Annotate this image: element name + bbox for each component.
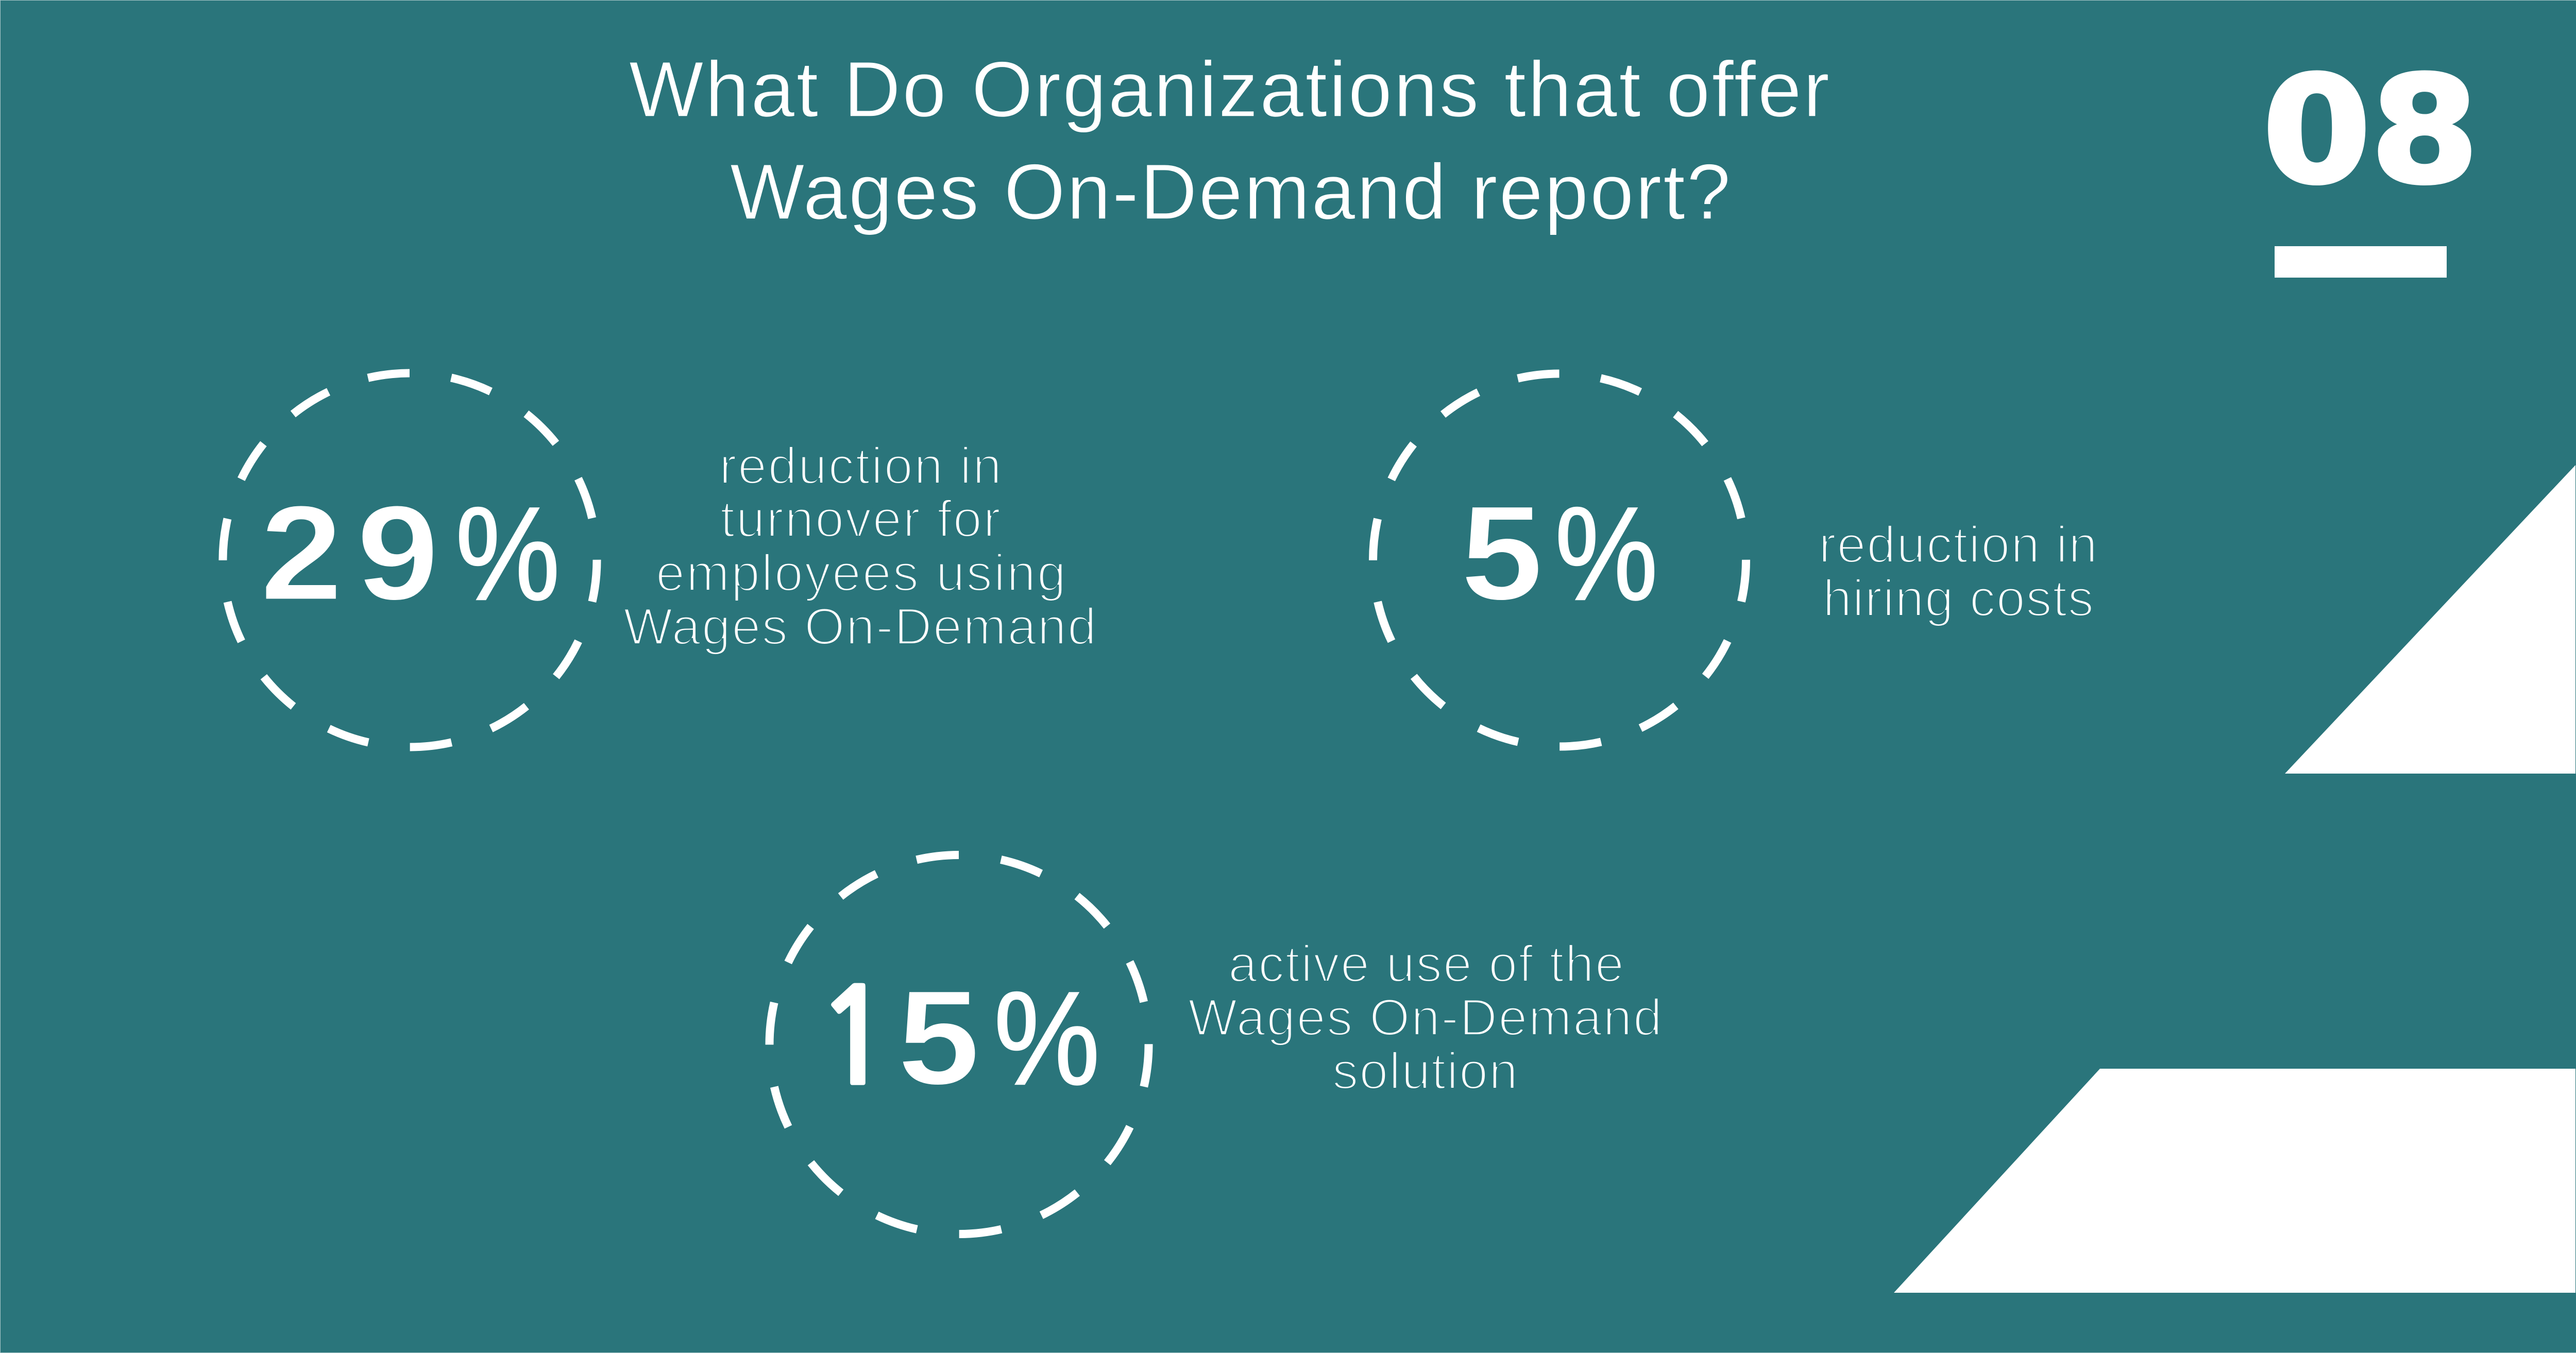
description 5%: hiring costs [1823,570,2094,627]
decorative white parallelogram [1894,1069,2575,1293]
description 29%: reduction in [719,437,1002,495]
value 5% [1461,477,1658,628]
value 29%: 2 [260,477,343,628]
description 29%: turnover for [720,490,1001,548]
description 5% [1819,516,2097,627]
dashed ring 15% [770,855,1149,1234]
value 29%: % [455,479,560,628]
stat: 5% hiring cost reduction [1373,374,2097,747]
value 5%: 5 [1461,477,1543,628]
dashed ring 29% [223,373,597,747]
description 15%: Wages On-Demand [1188,989,1662,1047]
title: Wages On-Demand report? [730,148,1731,236]
value 29%: 9 [357,477,439,628]
value 5%: % [1555,479,1658,628]
value 15%: % [994,964,1100,1112]
value 15%: 1 [815,973,895,1104]
stat: 29% turnover reduction [223,373,1096,747]
title [629,45,1829,236]
description 15%: active use of the [1228,935,1624,993]
dashed ring 5% [1373,374,1746,747]
description 5%: reduction in [1819,516,2097,574]
description 29%: employees using [656,544,1066,602]
decorative white triangle [2285,465,2575,774]
title: What Do Organizations that offer [629,45,1829,133]
section number badge [2263,45,2479,278]
description 15%: solution [1332,1042,1518,1100]
stat: 15% active use [770,855,1662,1234]
number 08: 08 [2263,45,2479,216]
value 15%: 5 [897,962,980,1113]
value 15% [815,962,1100,1113]
badge underline bar [2275,246,2447,278]
description 29% [623,437,1096,656]
value 29% [260,477,560,628]
description 15% [1188,935,1662,1100]
description 29%: Wages On-Demand [623,598,1096,656]
